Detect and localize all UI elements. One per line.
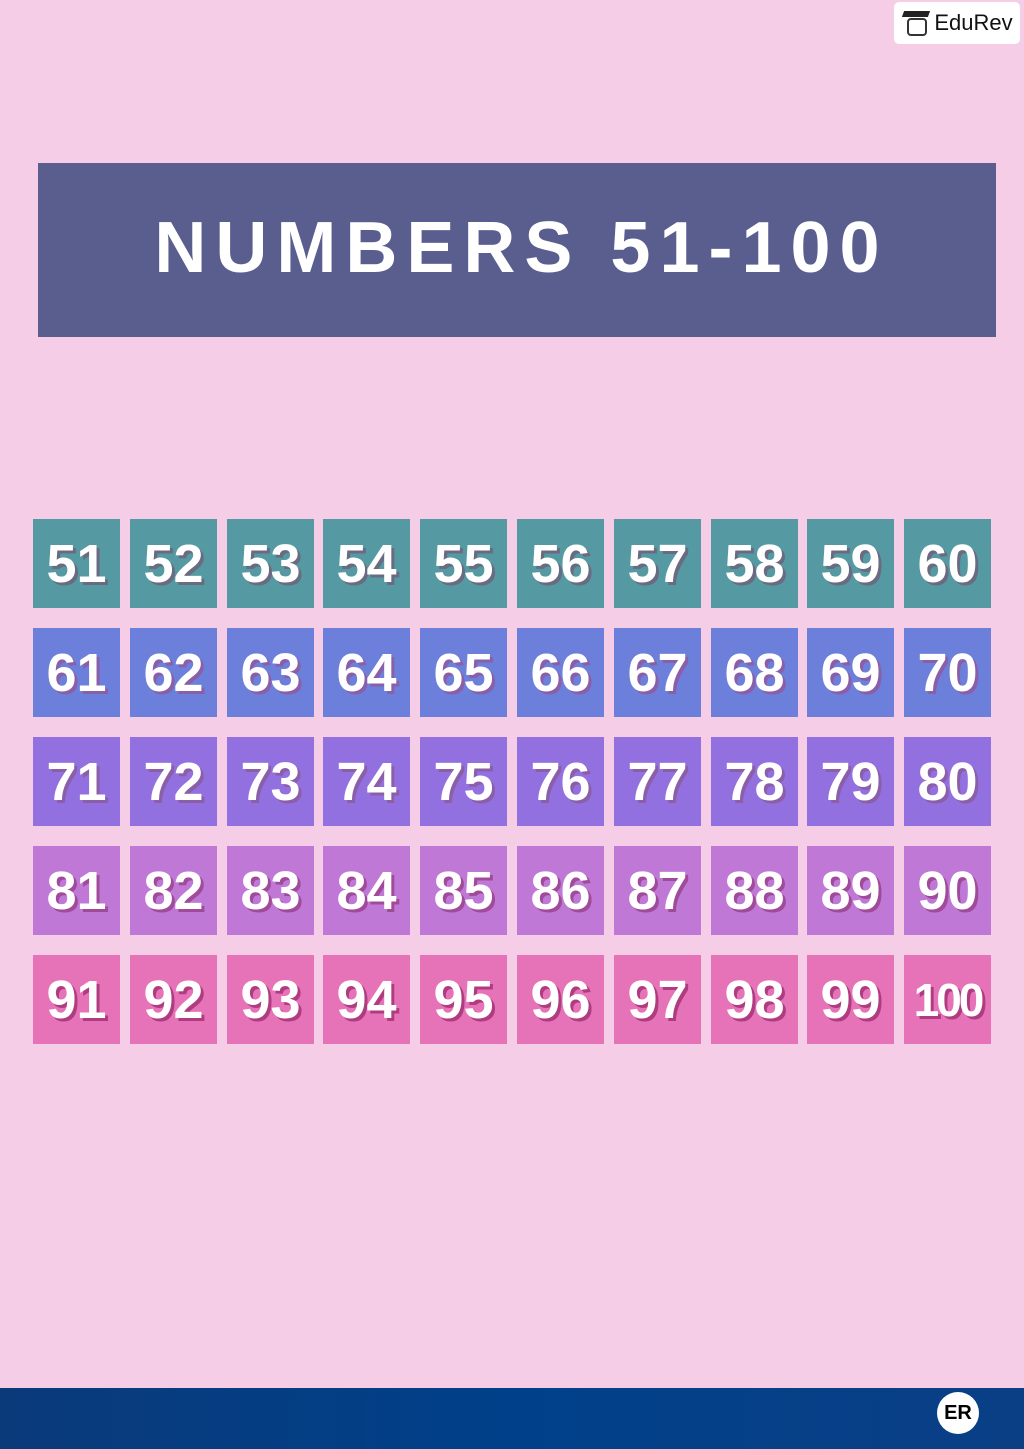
number grid: 60: [917, 534, 978, 594]
number grid: 94: [336, 970, 397, 1030]
number grid: 65: [433, 643, 494, 703]
number grid: [33, 519, 991, 1044]
number grid: 98: [724, 970, 785, 1030]
number grid: 82: [143, 861, 204, 921]
number grid: 62: [143, 643, 204, 703]
number grid: 55: [433, 534, 494, 594]
number grid: 86: [530, 861, 591, 921]
number grid: 77: [627, 752, 688, 812]
icon: ER badge: ER: [944, 1402, 972, 1424]
number grid: 88: [724, 861, 785, 921]
number grid: 75: [433, 752, 494, 812]
number grid: 97: [627, 970, 688, 1030]
number grid: 100: [914, 974, 981, 1026]
number grid: 79: [820, 752, 881, 812]
number grid: 87: [627, 861, 688, 921]
logo: EduRev: EduRev: [934, 10, 1013, 35]
number grid: 85: [433, 861, 494, 921]
number grid: 72: [143, 752, 204, 812]
number grid: 70: [917, 643, 978, 703]
icon: ER badge: [937, 1392, 979, 1434]
number grid: 53: [240, 534, 301, 594]
number grid: 73: [240, 752, 301, 812]
number grid: 52: [143, 534, 204, 594]
number grid: 66: [530, 643, 591, 703]
number grid: 95: [433, 970, 494, 1030]
number grid: 54: [336, 534, 397, 594]
number grid: 84: [336, 861, 397, 921]
title banner: NUMBERS 51-100: [154, 208, 889, 288]
number grid: 92: [143, 970, 204, 1030]
number grid: 91: [46, 970, 107, 1030]
number grid: 56: [530, 534, 591, 594]
number grid: 99: [820, 970, 881, 1030]
title banner: [38, 163, 996, 337]
number grid: 83: [240, 861, 301, 921]
number grid: 81: [46, 861, 107, 921]
number grid: 64: [336, 643, 397, 703]
number grid: 90: [917, 861, 978, 921]
number grid: 63: [240, 643, 301, 703]
number grid: 67: [627, 643, 688, 703]
number grid: 74: [336, 752, 397, 812]
number grid: 59: [820, 534, 881, 594]
number grid: 76: [530, 752, 591, 812]
number grid: 68: [724, 643, 785, 703]
logo: EduRev: [894, 2, 1020, 44]
number grid: 58: [724, 534, 785, 594]
footer bar: [0, 1388, 1024, 1449]
number grid: 78: [724, 752, 785, 812]
number grid: 71: [46, 752, 107, 812]
number grid: 61: [46, 643, 107, 703]
number grid: 96: [530, 970, 591, 1030]
number grid: 69: [820, 643, 881, 703]
number grid: 93: [240, 970, 301, 1030]
number grid: 80: [917, 752, 978, 812]
number grid: 89: [820, 861, 881, 921]
number grid: 51: [46, 534, 107, 594]
number grid: 57: [627, 534, 688, 594]
